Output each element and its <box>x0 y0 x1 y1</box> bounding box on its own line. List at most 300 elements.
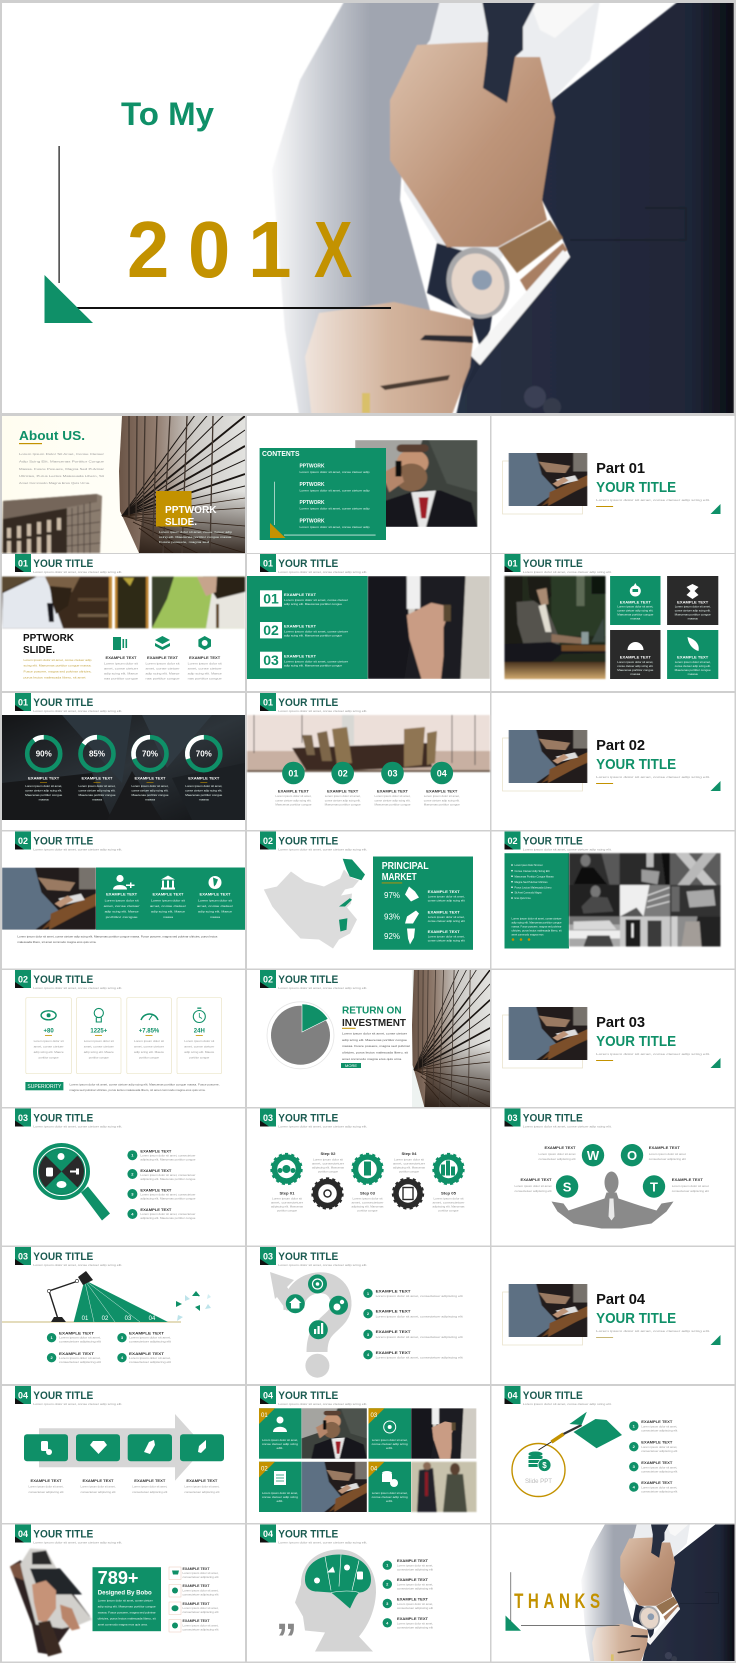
light cone: 04 <box>149 1316 156 1322</box>
text block: footer <box>17 934 218 944</box>
text columns: adip scing elit. Maece <box>104 672 138 676</box>
step labels bottom: porttitor congue <box>358 1208 378 1212</box>
photo: office building <box>119 346 245 606</box>
card: 1225+: Lorem ipsum dolor sit <box>84 1039 114 1043</box>
step captions: consectetuer adipiscing elit <box>184 1490 220 1494</box>
header: YOUR TITLE <box>523 1390 583 1402</box>
card: +7.85%: adip scing elit. Maece <box>134 1050 164 1054</box>
step box 4 <box>180 1434 224 1461</box>
panel: four tiles with woman photo <box>492 554 734 691</box>
text block: massa. Fusce posuere, magna sed pulvinar <box>512 924 562 928</box>
photo: woman on laptop <box>504 576 606 679</box>
light cone: 02 <box>102 1316 109 1322</box>
item 1 <box>629 1419 677 1432</box>
map: China <box>264 859 365 948</box>
donut captions: EXAMPLE TEXT <box>82 776 113 781</box>
frame line vertical <box>510 1572 512 1623</box>
tile 2: Maecenas porttitor congue <box>675 612 711 616</box>
item 4: 4 <box>367 1352 370 1357</box>
icon: dart <box>538 1412 622 1450</box>
tile 3: massa <box>630 672 641 676</box>
item 3: Lorem ipsum dolor sit amet, <box>641 1466 677 1470</box>
item 3: Lorem ipsum dolor sit amet, consectetuer <box>140 1192 195 1196</box>
icon: layers <box>155 636 170 650</box>
circle O: O <box>627 1148 637 1163</box>
column texts: adip scing elit. Maece <box>198 910 232 914</box>
text columns <box>104 655 222 681</box>
item 2 <box>169 1583 219 1597</box>
item 1 <box>127 1148 196 1162</box>
header <box>260 1386 367 1406</box>
panel: market <box>373 856 473 950</box>
item 1: Lorem ipsum dolor sit amet, <box>641 1424 677 1428</box>
circle S: S <box>563 1179 572 1194</box>
donut captions: Lorem ipsum dolor sit amet, <box>185 784 222 788</box>
donut 70%: 70% <box>142 750 158 758</box>
step labels bottom: adipiscing elit. Maecenas <box>432 1204 465 1208</box>
item 3: consectetuer adipiscing elit <box>182 1610 219 1614</box>
title: 201X: 2 <box>127 204 169 294</box>
circle W <box>582 1144 604 1166</box>
donut captions: Maecenas porttitor congue <box>185 793 223 797</box>
panel: head brain <box>247 1524 490 1662</box>
bullet list: Sit Amet Commodo Magna <box>514 891 542 895</box>
item 2: EXAMPLE TEXT <box>59 1351 95 1356</box>
header: 02 <box>263 836 273 846</box>
step labels top: porttitor congue <box>399 1170 419 1174</box>
item 4: consectetuer adipiscing elit <box>641 1490 677 1494</box>
bullet list: Conse Ctetuer Adip Scing Elit <box>514 869 550 873</box>
text block: adip scing elit. Maecenas porttitor congue <box>512 920 562 924</box>
arrow: process <box>39 1414 205 1481</box>
step labels top <box>312 1151 425 1174</box>
panel: slide pptwork <box>2 554 245 691</box>
text block: amet commodo magna eros quis urna. <box>98 1622 148 1626</box>
column texts: EXAMPLE TEXT <box>106 892 138 896</box>
icon: triangle <box>506 1616 521 1631</box>
item 4: EXAMPLE TEXT <box>641 1480 673 1485</box>
item 4 <box>363 1350 463 1360</box>
step labels bottom: Lorem ipsum dolor sit <box>272 1196 302 1200</box>
card: 1225+ <box>76 998 121 1074</box>
step captions: Lorem ipsum dolor sit amet, <box>325 794 361 798</box>
text block: adip scing elit. Maecenas porttitor congue <box>98 1604 156 1608</box>
step labels top: amet, consectetuer <box>393 1162 425 1166</box>
step labels bottom: amet, consectetuer <box>432 1200 464 1204</box>
card: +7.85%: Lorem ipsum dolor sit <box>134 1039 164 1043</box>
header <box>260 1108 367 1128</box>
item 2: EXAMPLE TEXT <box>140 1168 172 1173</box>
text columns: amet, conse ctetuer <box>146 667 180 671</box>
item 2: Lorem ipsum dolor sit amet, <box>641 1445 677 1449</box>
header: 03 <box>18 1252 28 1262</box>
header: Lorem ipsum dolor sit amet, conse ctetuer adip scing elit. <box>278 1540 367 1544</box>
gear 1 <box>273 1155 300 1183</box>
header: YOUR TITLE <box>523 836 583 848</box>
text block: gold lorem: scing elit. Maecenas porttitor congue massa. <box>24 664 92 668</box>
item 1: EXAMPLE TEXT <box>59 1330 95 1335</box>
panel: numbered list with wrist photo <box>247 554 490 691</box>
item 3: consectetuer adipiscing elit <box>129 1340 171 1344</box>
tile 3: EXAMPLE TEXT <box>620 655 651 660</box>
item 3: EXAMPLE TEXT <box>641 1460 673 1465</box>
text block: Lorem ipsum dolor sit amet, conse ctetuer <box>98 1598 153 1602</box>
item 01: EXAMPLE TEXT <box>284 592 317 597</box>
panel: donut percentages <box>2 693 245 830</box>
gear 4 <box>394 1180 422 1207</box>
step captions: conse ctetuer adip scing elit. <box>374 798 411 802</box>
donut 70% <box>129 733 171 774</box>
text block: gold lorem: Fusce posuere, magna sed pulvinar ultricies, <box>24 670 92 674</box>
icon: coins <box>528 1452 551 1472</box>
text block: photo caption: scing elit. Maecenas porttitor congue massa. <box>159 535 232 539</box>
item 1 <box>47 1330 101 1344</box>
column texts: adip scing elit. Maece <box>151 910 185 914</box>
accent line <box>19 443 42 444</box>
icon: gold triangle <box>270 523 286 538</box>
step labels bottom: porttitor congue <box>277 1208 297 1212</box>
donut captions: Lorem ipsum dolor sit amet, <box>78 784 116 788</box>
item 3: EXAMPLE TEXT <box>129 1330 165 1335</box>
step captions: EXAMPLE TEXT <box>278 789 309 794</box>
accent line <box>596 506 613 507</box>
item 2 <box>629 1439 677 1453</box>
accent line <box>596 1060 613 1061</box>
column texts: Lorem ipsum dolor sit <box>105 898 139 902</box>
label: PPTWORK SLIDE.: SLIDE. <box>165 517 197 528</box>
text block: about: Adip Scing Elit. Maecenas Porttitor Congue <box>19 460 104 464</box>
circle T: T <box>650 1179 658 1194</box>
panel: conference room steps <box>247 693 490 830</box>
tile 3 <box>610 630 660 679</box>
step captions: conse ctetuer adip scing elit. <box>275 798 312 802</box>
contents list: PPTWORK <box>300 482 325 488</box>
market row 92% <box>384 928 465 944</box>
item 2: Lorem ipsum dolor sit amet, <box>397 1583 433 1587</box>
item 02: Lorem ipsum dolor sit amet, conse ctetuer <box>284 629 348 633</box>
step captions: Lorem ipsum dolor sit amet, <box>132 1484 167 1488</box>
photo: desk <box>508 453 588 506</box>
header: Lorem ipsum dolor sit amet, conse ctetuer adip scing elit. <box>523 570 612 574</box>
header: 02 <box>507 836 518 846</box>
donut captions: EXAMPLE TEXT <box>28 776 60 781</box>
step labels bottom: Step 01 <box>280 1190 295 1196</box>
photo: man adjusting tie with watch <box>272 0 734 420</box>
header: Lorem ipsum dolor sit amet, conse ctetuer adip scing elit. <box>278 848 367 852</box>
donut captions: conse ctetuer adip scing elit. <box>78 788 116 792</box>
decorative triangles <box>176 1291 211 1321</box>
tile 03 <box>368 1408 476 1459</box>
tile 03: elit. <box>386 1446 393 1450</box>
header <box>504 832 612 852</box>
item 4: 4 <box>121 1355 124 1360</box>
donut 70% second: 70% <box>196 750 212 758</box>
header: 02 <box>263 974 273 984</box>
item 3: EXAMPLE TEXT <box>397 1596 429 1602</box>
step captions: consectetuer adipiscing elit <box>132 1490 167 1494</box>
label W: consectetuer adipiscing elit <box>538 1157 576 1161</box>
tile 2 <box>667 576 718 625</box>
panel: about us <box>2 346 245 606</box>
icon: hexagon <box>198 636 211 650</box>
panel: thanks <box>492 1524 734 1663</box>
contents list: Lorem ipsum dolor sit amet, conse ctetuer adip <box>300 506 370 510</box>
card: +80: +80 <box>44 1029 54 1035</box>
item 1: consectetuer adipiscing elit <box>59 1340 101 1344</box>
market row 97%: Lorem ipsum dolor sit amet, <box>428 894 465 898</box>
step captions: Maecenas porttitor congue <box>424 803 460 807</box>
tile 03: conse ctetuer adip scing <box>372 1442 408 1446</box>
icon: globe <box>208 876 222 889</box>
tile 1: EXAMPLE TEXT <box>620 599 651 604</box>
item 4: Lorem ipsum dolor sit amet, consectetuer adipiscing elit <box>376 1356 463 1360</box>
heading: PRINCIPAL MARKET <box>382 861 429 883</box>
item 2: consectetuer adipiscing elit <box>397 1587 433 1591</box>
title: To My: To My <box>121 96 214 132</box>
item 2 <box>383 1577 433 1591</box>
item 2: 2 <box>131 1172 134 1176</box>
label T: Lorem ipsum dolor sit amet <box>672 1184 709 1188</box>
icon: triangle <box>710 1058 720 1068</box>
contents list <box>300 464 370 529</box>
tile 3: Lorem ipsum dolor sit amet, <box>617 660 653 664</box>
label S: consectetuer adipiscing elit <box>514 1189 552 1193</box>
item 4: 4 <box>633 1484 636 1490</box>
green band <box>96 868 245 930</box>
subtitle: Lorem ipsum dolor sit amet, conse ctetuer adip scing elit. <box>596 1329 710 1333</box>
step labels top: amet, consectetuer <box>312 1162 344 1166</box>
header: YOUR TITLE <box>278 1390 338 1402</box>
text block: adip scing elit. Maecenas porttitor congue <box>342 1038 407 1042</box>
header <box>260 832 367 852</box>
text columns: Lorem ipsum dolor sit <box>188 662 222 666</box>
donut captions: conse ctetuer adip scing elit. <box>25 788 62 792</box>
column texts: massa <box>210 915 220 919</box>
text block: massa. Fusce posuere, magna sed pulvinar <box>342 1044 410 1048</box>
contents list: Lorem ipsum dolor sit amet, conse ctetuer adip <box>300 470 370 474</box>
card: +80: adip scing elit. Maece <box>34 1050 64 1054</box>
text block: superiority <box>70 1082 220 1092</box>
column texts <box>104 892 233 919</box>
circle W: W <box>587 1148 600 1163</box>
text block: photo caption: Fusce posuere, magna sed <box>159 540 209 544</box>
item 3 <box>127 1188 196 1200</box>
text block: massa. Fusce posuere, magna sed pulvinar <box>98 1610 156 1614</box>
light cone <box>74 1280 168 1322</box>
header <box>15 832 122 852</box>
item 2: EXAMPLE TEXT <box>641 1439 673 1444</box>
step circles: 02 <box>338 768 348 778</box>
photo: desk <box>508 1284 588 1337</box>
photo: building facade <box>412 900 490 1160</box>
item 03: 03 <box>263 652 279 668</box>
circle T <box>643 1175 665 1198</box>
item 2 <box>127 1168 196 1181</box>
step captions: Maecenas porttitor congue <box>275 803 312 807</box>
item 3: Lorem ipsum dolor sit amet, <box>182 1606 219 1610</box>
tile 2: conse ctetuer adip scing elit. <box>675 608 711 612</box>
item 1: EXAMPLE TEXT <box>641 1419 673 1424</box>
tile 1: conse ctetuer adip scing elit. <box>617 608 653 612</box>
heading: part: Part 01 <box>596 460 645 477</box>
button: MORE <box>341 1063 361 1068</box>
item 2: 2 <box>386 1582 389 1587</box>
item 2: Lorem ipsum dolor sit amet, <box>182 1588 219 1592</box>
donut 90% <box>21 731 67 777</box>
gold square <box>156 491 192 526</box>
tile 01: 01 <box>261 1413 268 1419</box>
market row 92%: Lorem ipsum dolor sit amet, <box>428 935 465 939</box>
label O <box>649 1145 686 1161</box>
item 03 <box>260 652 348 668</box>
frame line vertical <box>58 146 60 283</box>
item 3: EXAMPLE TEXT <box>140 1188 172 1192</box>
column texts: Lorem ipsum dolor sit <box>151 898 185 902</box>
text block: about <box>19 452 104 485</box>
panel: return on investment <box>247 900 490 1160</box>
header: 03 <box>263 1113 273 1123</box>
header: 04 <box>507 1390 518 1400</box>
heading: PPTWORK SLIDE. <box>23 633 75 656</box>
tile 4: EXAMPLE TEXT <box>677 655 709 660</box>
table line <box>2 1322 181 1323</box>
header: Lorem ipsum dolor sit amet, conse ctetuer adip scing elit. <box>278 1263 367 1267</box>
step captions: Lorem ipsum dolor sit amet, <box>80 1484 116 1488</box>
header: Lorem ipsum dolor sit amet, conse ctetuer adip scing elit. <box>33 1402 122 1406</box>
icon: user plus <box>113 875 134 890</box>
item 4: consectetuer adipiscing elit <box>397 1626 433 1630</box>
heading: About US.: About US. <box>19 428 85 443</box>
text columns: adip scing elit. Maece <box>188 672 222 676</box>
header: 01 <box>507 558 518 568</box>
item 3: 3 <box>131 1192 134 1196</box>
button: MORE: MORE <box>345 1063 357 1068</box>
header: Lorem ipsum dolor sit amet, conse ctetuer adip scing elit. <box>523 1124 612 1128</box>
item 3: EXAMPLE TEXT <box>376 1329 411 1334</box>
photo: wrist <box>368 576 490 679</box>
icon: gold marks <box>512 938 530 941</box>
contents list: PPTWORK <box>300 464 325 470</box>
step box 1 <box>24 1434 68 1461</box>
donut 85% <box>74 731 120 777</box>
item 1: Lorem ipsum dolor sit amet, consectetuer adipiscing elit <box>376 1294 463 1298</box>
card: 24H: 24H <box>194 1029 205 1035</box>
panel: four photo tiles <box>247 1386 490 1523</box>
step labels top: Step 04 <box>402 1151 417 1156</box>
panel: part 03 <box>492 970 734 1107</box>
item 4 <box>117 1351 171 1364</box>
item 02: 02 <box>263 622 279 638</box>
subtitle: Lorem ipsum dolor sit amet, conse ctetuer adip scing elit. <box>596 775 710 779</box>
donut captions: conse ctetuer adip scing elit. <box>132 788 169 792</box>
header: Lorem ipsum dolor sit amet, conse ctetuer adip scing elit. <box>33 1540 122 1544</box>
heading: RETURN ON: RETURN ON <box>342 1006 402 1017</box>
column texts: Lorem ipsum dolor sit <box>198 898 232 902</box>
step captions: Maecenas porttitor congue <box>374 803 411 807</box>
donut captions: Maecenas porttitor congue <box>132 793 169 797</box>
header: 02 <box>18 974 28 984</box>
item 2: consectetuer adipiscing elit <box>182 1592 219 1596</box>
item 2: EXAMPLE TEXT <box>376 1309 411 1314</box>
header: Lorem ipsum dolor sit amet, conse ctetuer adip scing elit. <box>278 1124 367 1128</box>
item 1: EXAMPLE TEXT <box>182 1566 210 1571</box>
item 4: adipiscing elit. Maecenas porttitor congue <box>140 1216 196 1220</box>
step labels top: porttitor congue <box>318 1170 338 1174</box>
header: 02 <box>18 836 28 846</box>
item 1: consectetuer adipiscing elit <box>397 1567 433 1571</box>
photo collage: grayscale <box>569 853 720 946</box>
item 4: consectetuer adipiscing elit <box>129 1360 171 1364</box>
text columns: amet, conse ctetuer <box>104 667 138 671</box>
heading: PRINCIPAL MARKET: PRINCIPAL <box>382 861 429 872</box>
item 4: Lorem ipsum dolor sit amet, <box>641 1486 677 1490</box>
icon: triangle <box>710 781 720 791</box>
heading: part: Part 02 <box>596 737 645 754</box>
text columns: Lorem ipsum dolor sit <box>104 662 138 666</box>
tile 1 <box>610 576 660 625</box>
header: 01 <box>263 558 273 568</box>
column texts: amet, conse ctetuer <box>150 904 186 908</box>
tile 2: EXAMPLE TEXT <box>677 599 709 604</box>
column texts: EXAMPLE TEXT <box>152 892 184 896</box>
item 3: Lorem ipsum dolor sit amet, <box>129 1336 171 1340</box>
tile 04 <box>368 1462 476 1512</box>
icon: coins: $ <box>542 1461 547 1470</box>
item 4 <box>383 1616 433 1630</box>
donut captions: massa <box>39 798 49 802</box>
market row 97%: EXAMPLE TEXT <box>428 889 460 894</box>
bullet list: Magna Sed Pulvinar Ultricies <box>514 880 548 884</box>
photo: desk <box>2 868 96 930</box>
label S: Lorem ipsum dolor sit amet <box>514 1184 552 1188</box>
step captions: Maecenas porttitor congue <box>325 803 361 807</box>
step captions: EXAMPLE TEXT <box>82 1478 114 1483</box>
text block: ultricies, purus lectus malesuada libero, sit <box>98 1616 156 1620</box>
header: YOUR TITLE <box>278 974 338 986</box>
header: 01 <box>263 698 273 708</box>
item 3: adipiscing elit. Maecenas porttitor congue <box>140 1196 196 1200</box>
item 3: EXAMPLE TEXT <box>182 1601 210 1606</box>
header: YOUR TITLE <box>33 697 93 709</box>
panel: principal market map <box>247 832 490 968</box>
panel: contents <box>247 416 490 553</box>
text block: Lorem ipsum dolor sit amet, conse ctetuer <box>512 916 562 920</box>
item 2: Lorem ipsum dolor sit amet, <box>59 1356 101 1360</box>
header: Lorem ipsum dolor sit amet, conse ctetuer adip scing elit. <box>33 848 122 852</box>
item 1: EXAMPLE TEXT <box>376 1288 411 1293</box>
item 01: adip scing elit. Maecenas porttitor congue <box>284 602 342 606</box>
green contents card <box>260 448 386 540</box>
contents list: PPTWORK <box>300 500 325 506</box>
tile 1: Lorem ipsum dolor sit amet, <box>617 604 653 608</box>
header: YOUR TITLE <box>33 558 93 570</box>
photo: small lower building <box>2 494 102 553</box>
panel: dart target <box>492 1386 734 1523</box>
text columns: EXAMPLE TEXT <box>189 655 221 660</box>
text block: ultricies, purus lectus malesuada libero, sit <box>342 1050 408 1054</box>
text block: amet commodo magna eros <box>512 932 544 936</box>
donut captions: massa <box>199 798 209 802</box>
text block: about: Ultricies, Purus Lectus Malesuada Libero, Sit <box>19 474 104 478</box>
market row 92%: EXAMPLE TEXT <box>428 929 460 934</box>
tile 4: Maecenas porttitor congue <box>675 668 711 672</box>
target ring <box>512 1444 565 1496</box>
step captions: Lorem ipsum dolor sit amet, <box>184 1484 220 1488</box>
icon: magnifier <box>33 1143 110 1220</box>
step labels bottom: amet, consectetuer <box>352 1200 384 1204</box>
step captions: Lorem ipsum dolor sit amet, <box>28 1484 64 1488</box>
accent line <box>596 783 613 784</box>
